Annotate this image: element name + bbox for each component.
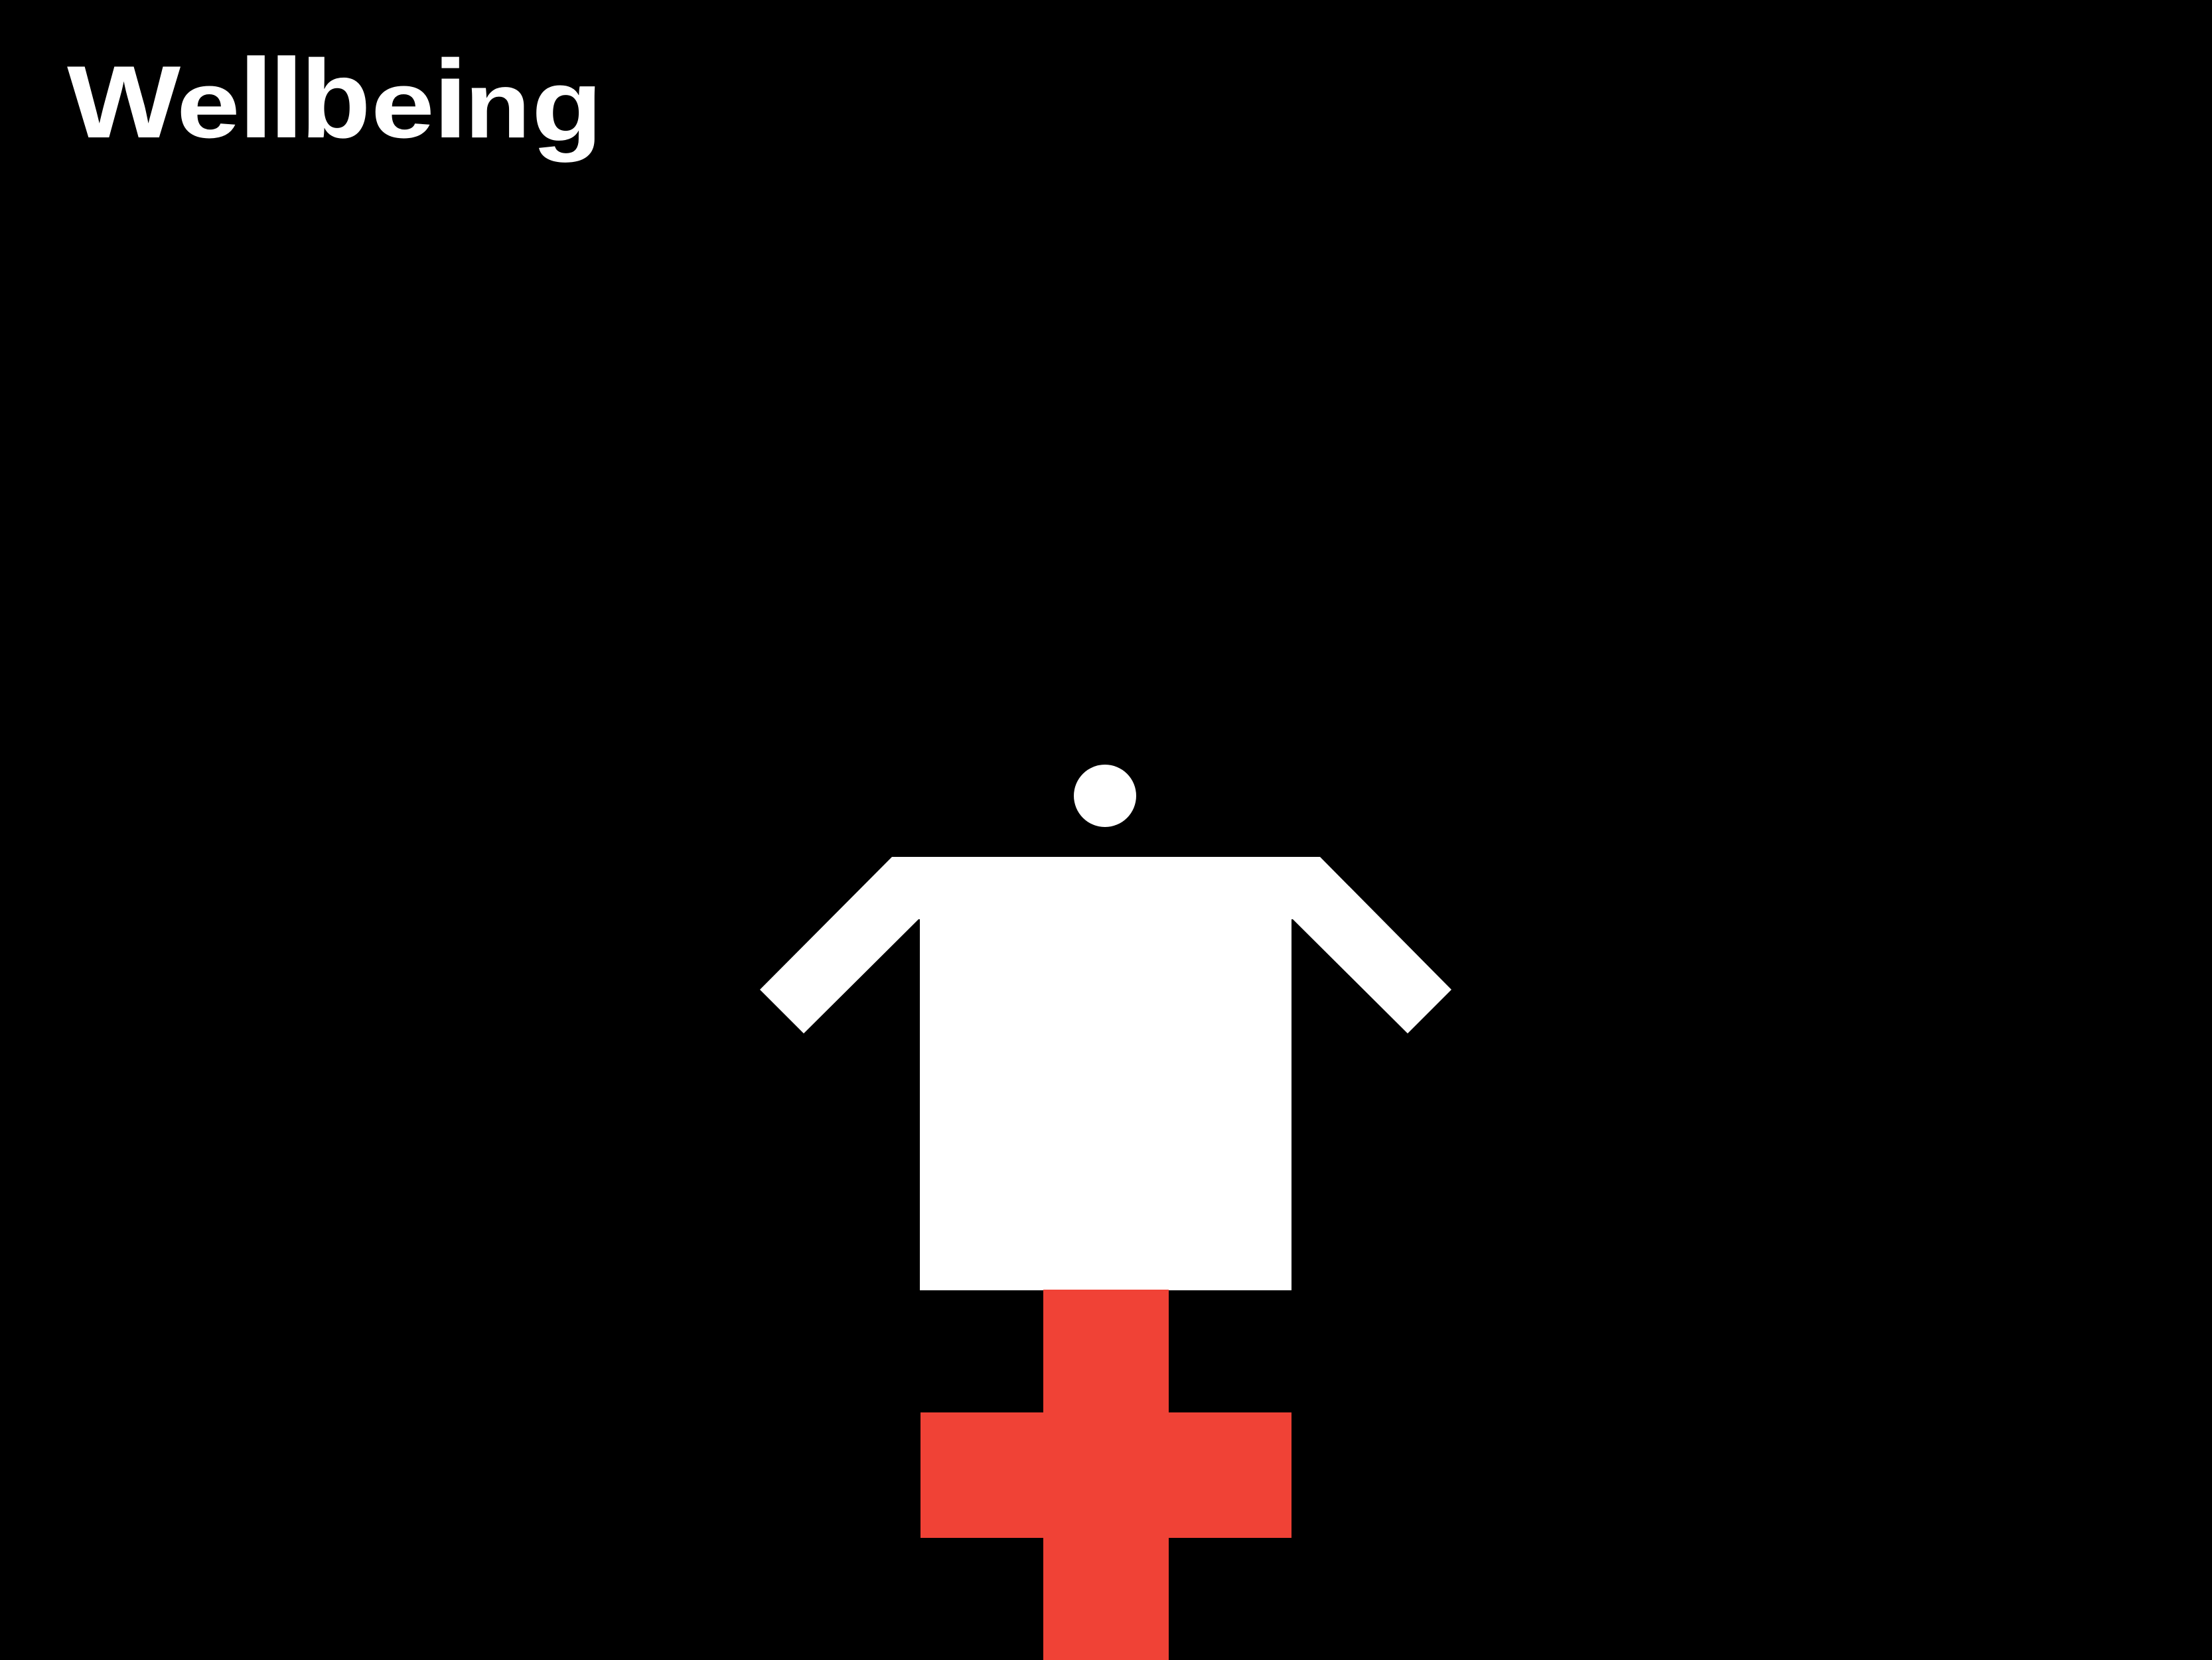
title: n xyxy=(465,53,530,157)
title: e xyxy=(177,51,240,158)
title xyxy=(66,35,603,163)
title: i xyxy=(433,37,468,161)
title: b xyxy=(301,37,371,161)
figure: person with medical cross xyxy=(760,765,1451,1660)
title: l xyxy=(269,35,304,162)
title: e xyxy=(371,51,435,158)
title: W xyxy=(66,44,181,159)
figure head xyxy=(1074,765,1136,827)
title: l xyxy=(238,35,273,162)
figure body with arms xyxy=(760,857,1451,1290)
title: g xyxy=(532,48,603,163)
red medical cross xyxy=(921,1290,1291,1660)
